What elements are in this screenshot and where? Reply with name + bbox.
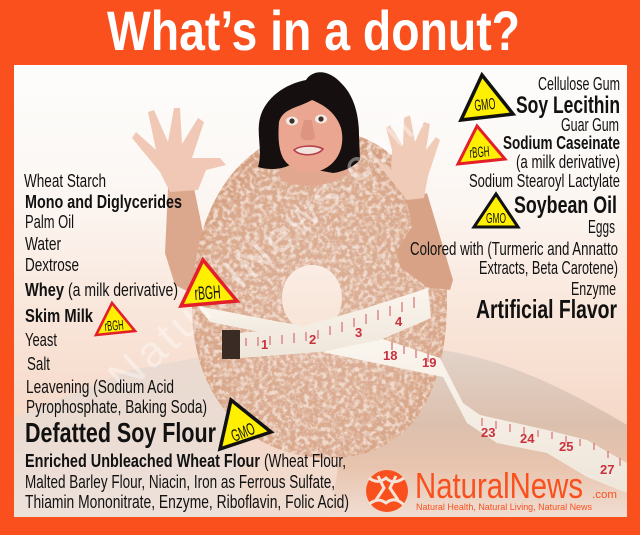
ingredient list: left column: Malted Barley Flour, Niacin, Iron as Ferrous Sulfate, <box>25 472 335 492</box>
icon: GMO warning, soybean oil <box>474 194 518 227</box>
ingredient list: left column: Whey <box>25 280 64 300</box>
neck <box>280 166 350 186</box>
title: What’s in a donut? <box>107 0 520 62</box>
tape numbers: 3 <box>355 325 362 340</box>
ingredient list: left column: Leavening (Sodium Acid <box>26 377 174 397</box>
tape tick marks <box>246 297 620 466</box>
tape numbers: 18 <box>383 348 397 363</box>
icon: GMO warning, soy lecithin <box>461 75 513 120</box>
measuring tape <box>198 288 627 493</box>
ingredient list: right column: Eggs <box>588 217 615 237</box>
icon: rBGH warning, sodium caseinate: rBGH <box>469 143 490 162</box>
woman's left arm behind donut <box>165 188 202 291</box>
ingredient list: left column: Skim Milk <box>25 306 94 326</box>
tape numbers: 25 <box>559 439 573 454</box>
tape numbers: 23 <box>481 425 495 440</box>
ingredient list: left column <box>24 171 349 512</box>
tape numbers: 1 <box>261 337 268 352</box>
ingredient list: left column: (a milk derivative) <box>68 280 178 300</box>
table shadow right <box>333 350 627 502</box>
tape numbers: 2 <box>309 332 316 347</box>
left hand <box>132 108 226 192</box>
ingredient list: left column: Thiamin Mononitrate, Enzyme, Riboflavin, Folic Acid) <box>25 492 349 512</box>
ingredient list: left column: Mono and Diglycerides <box>25 192 182 212</box>
icon: GMO warning, defatted soy flour: GMO <box>228 419 258 446</box>
hair <box>258 72 360 173</box>
ingredient list: left column: Water <box>25 234 61 254</box>
right arm and hand <box>373 115 453 290</box>
eyes <box>286 114 327 126</box>
icon: GMO warning, soybean oil: GMO <box>486 210 506 227</box>
icon: rBGH warning, whey <box>181 260 237 306</box>
tape numbers: 27 <box>600 462 614 477</box>
woman's head <box>258 72 360 186</box>
logo tagline: Natural Health, Natural Living, Natural News <box>416 502 592 512</box>
ingredient list: left column: Pyrophosphate, Baking Soda) <box>26 397 207 417</box>
tape numbers: 24 <box>520 431 535 446</box>
icon: rBGH warning, skim milk: rBGH <box>104 316 124 334</box>
face <box>278 100 342 172</box>
grimace mouth <box>294 146 323 155</box>
tape numbers: 4 <box>395 314 403 329</box>
tape rear band and tail <box>322 338 627 493</box>
icon: rBGH warning, whey: rBGH <box>194 282 221 305</box>
ingredient list: left column: Dextrose <box>25 255 79 275</box>
logo: Natural News: .com <box>592 489 617 501</box>
logo wordmark: NaturalNews <box>415 465 583 506</box>
watermark: NaturalNews.com <box>99 95 433 402</box>
icon: rBGH warning, skim milk <box>96 303 135 335</box>
ingredient list: left column: Defatted Soy Flour <box>25 417 216 448</box>
ingredient list: left column: (Wheat Flour, <box>264 451 346 471</box>
table shadow left <box>14 350 240 517</box>
nose <box>301 120 315 140</box>
ingredient list: left column: Yeast <box>25 330 57 350</box>
logo: Natural News <box>366 465 617 512</box>
tape back band <box>198 306 300 332</box>
ingredient list: left column: Enriched Unbleached Wheat Flour <box>25 451 260 471</box>
tape metal tip <box>222 330 240 359</box>
ingredient list: left column: Salt <box>27 354 50 374</box>
icon: GMO warning, soy lecithin: GMO <box>474 96 496 115</box>
tape numbers <box>261 314 614 477</box>
icon: rBGH warning, sodium caseinate <box>458 126 505 164</box>
donut body <box>192 136 447 458</box>
tape numbers: 19 <box>422 355 436 370</box>
logo globe <box>366 470 408 512</box>
ingredient list: left column: Wheat Starch <box>24 171 106 191</box>
ingredient list: left column: Palm Oil <box>25 212 74 232</box>
tape front band <box>240 288 431 358</box>
ingredient list: right column: Enzyme <box>571 279 616 299</box>
ingredient list: right column <box>410 74 620 324</box>
icon: GMO warning, defatted soy flour <box>220 400 271 449</box>
